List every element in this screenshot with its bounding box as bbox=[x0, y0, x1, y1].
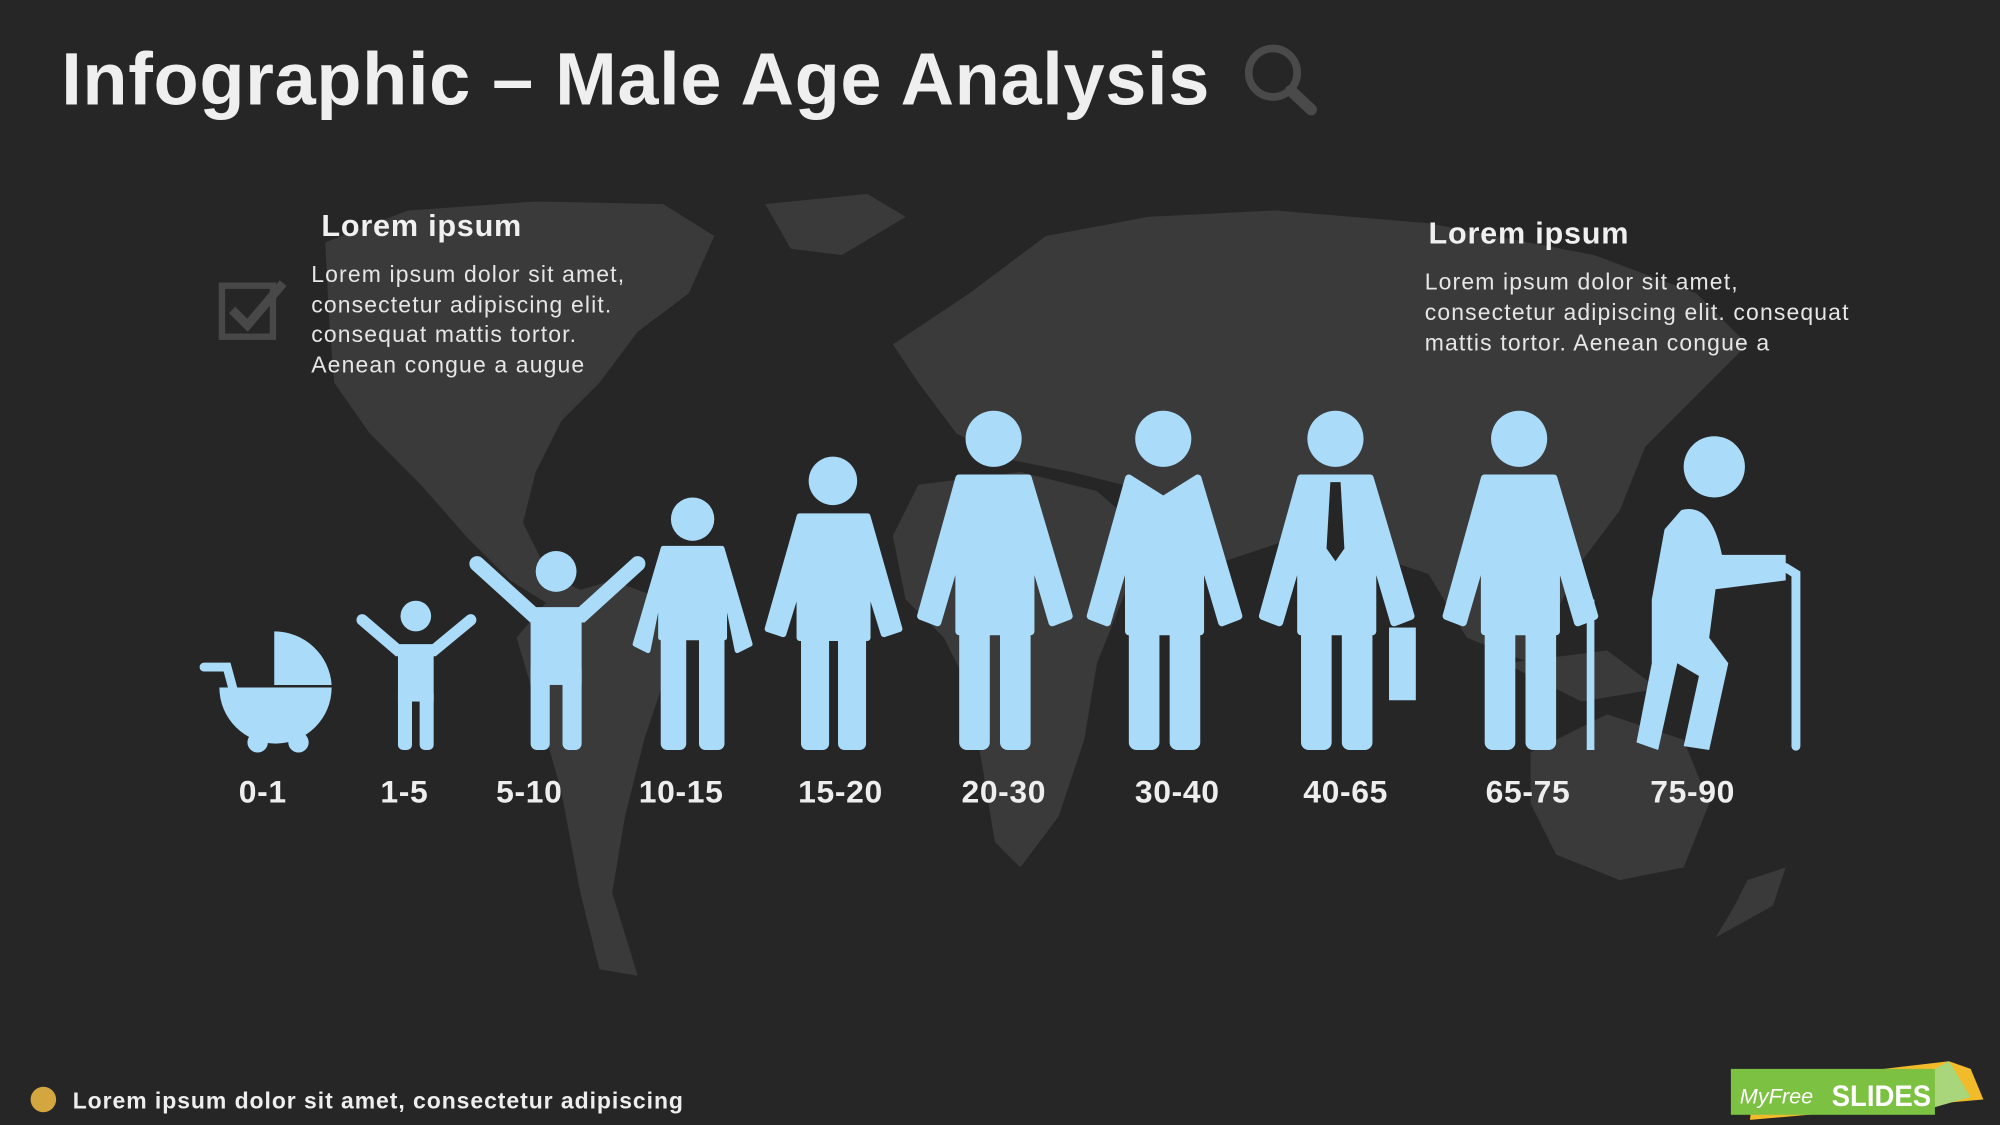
text block: right: mattis tortor. Aenean congue a bbox=[1425, 330, 1770, 356]
logo bbox=[1731, 1061, 1983, 1120]
age labels: 30-40 bbox=[1135, 773, 1220, 809]
age labels: 40-65 bbox=[1303, 773, 1388, 809]
age labels: 0-1 bbox=[239, 773, 287, 809]
text block: left: consequat mattis tortor. bbox=[311, 321, 577, 347]
logo: SLIDES bbox=[1832, 1080, 1931, 1113]
text block: left: consectetur adipiscing elit. bbox=[311, 291, 612, 317]
age labels bbox=[239, 773, 1735, 809]
age labels: 5-10 bbox=[496, 773, 563, 809]
text block: right: consectetur adipiscing elit. consequat bbox=[1425, 299, 1850, 325]
age labels: 75-90 bbox=[1650, 773, 1735, 809]
age labels: 10-15 bbox=[639, 773, 723, 809]
text block: left bbox=[311, 209, 625, 377]
text block: left: Aenean congue a augue bbox=[311, 351, 585, 377]
figure 15-20 bbox=[768, 457, 899, 750]
age labels: 1-5 bbox=[380, 773, 428, 809]
figure 5-10 bbox=[477, 551, 638, 750]
figure 75-90 bbox=[1636, 436, 1796, 750]
icon: checkbox bbox=[222, 283, 283, 337]
logo: MyFree bbox=[1740, 1083, 1813, 1108]
icon: magnifier bbox=[1249, 48, 1311, 110]
figure 20-30 bbox=[921, 411, 1069, 750]
figure 1-5 bbox=[362, 601, 471, 750]
figure 40-65 bbox=[1263, 411, 1416, 750]
footer note: Lorem ipsum dolor sit amet, consectetur adipiscing bbox=[73, 1087, 684, 1113]
world map background bbox=[325, 194, 1786, 976]
age labels: 15-20 bbox=[798, 773, 883, 809]
title: Infographic – Male Age Analysis bbox=[61, 38, 1210, 121]
text block: right bbox=[1425, 217, 1850, 356]
figure 30-40 bbox=[1091, 411, 1239, 750]
figure 10-15 bbox=[635, 497, 750, 750]
figure 65-75 bbox=[1446, 411, 1594, 750]
text block: left: Lorem ipsum dolor sit amet, bbox=[311, 261, 625, 287]
figures bbox=[204, 411, 1796, 753]
icon: stroller 0-1 bbox=[204, 631, 332, 753]
text block: left: Lorem ipsum bbox=[321, 209, 522, 243]
text block: right: Lorem ipsum dolor sit amet, bbox=[1425, 269, 1739, 295]
age labels: 65-75 bbox=[1486, 773, 1570, 809]
text block: right: Lorem ipsum bbox=[1429, 217, 1629, 251]
age labels: 20-30 bbox=[961, 773, 1046, 809]
